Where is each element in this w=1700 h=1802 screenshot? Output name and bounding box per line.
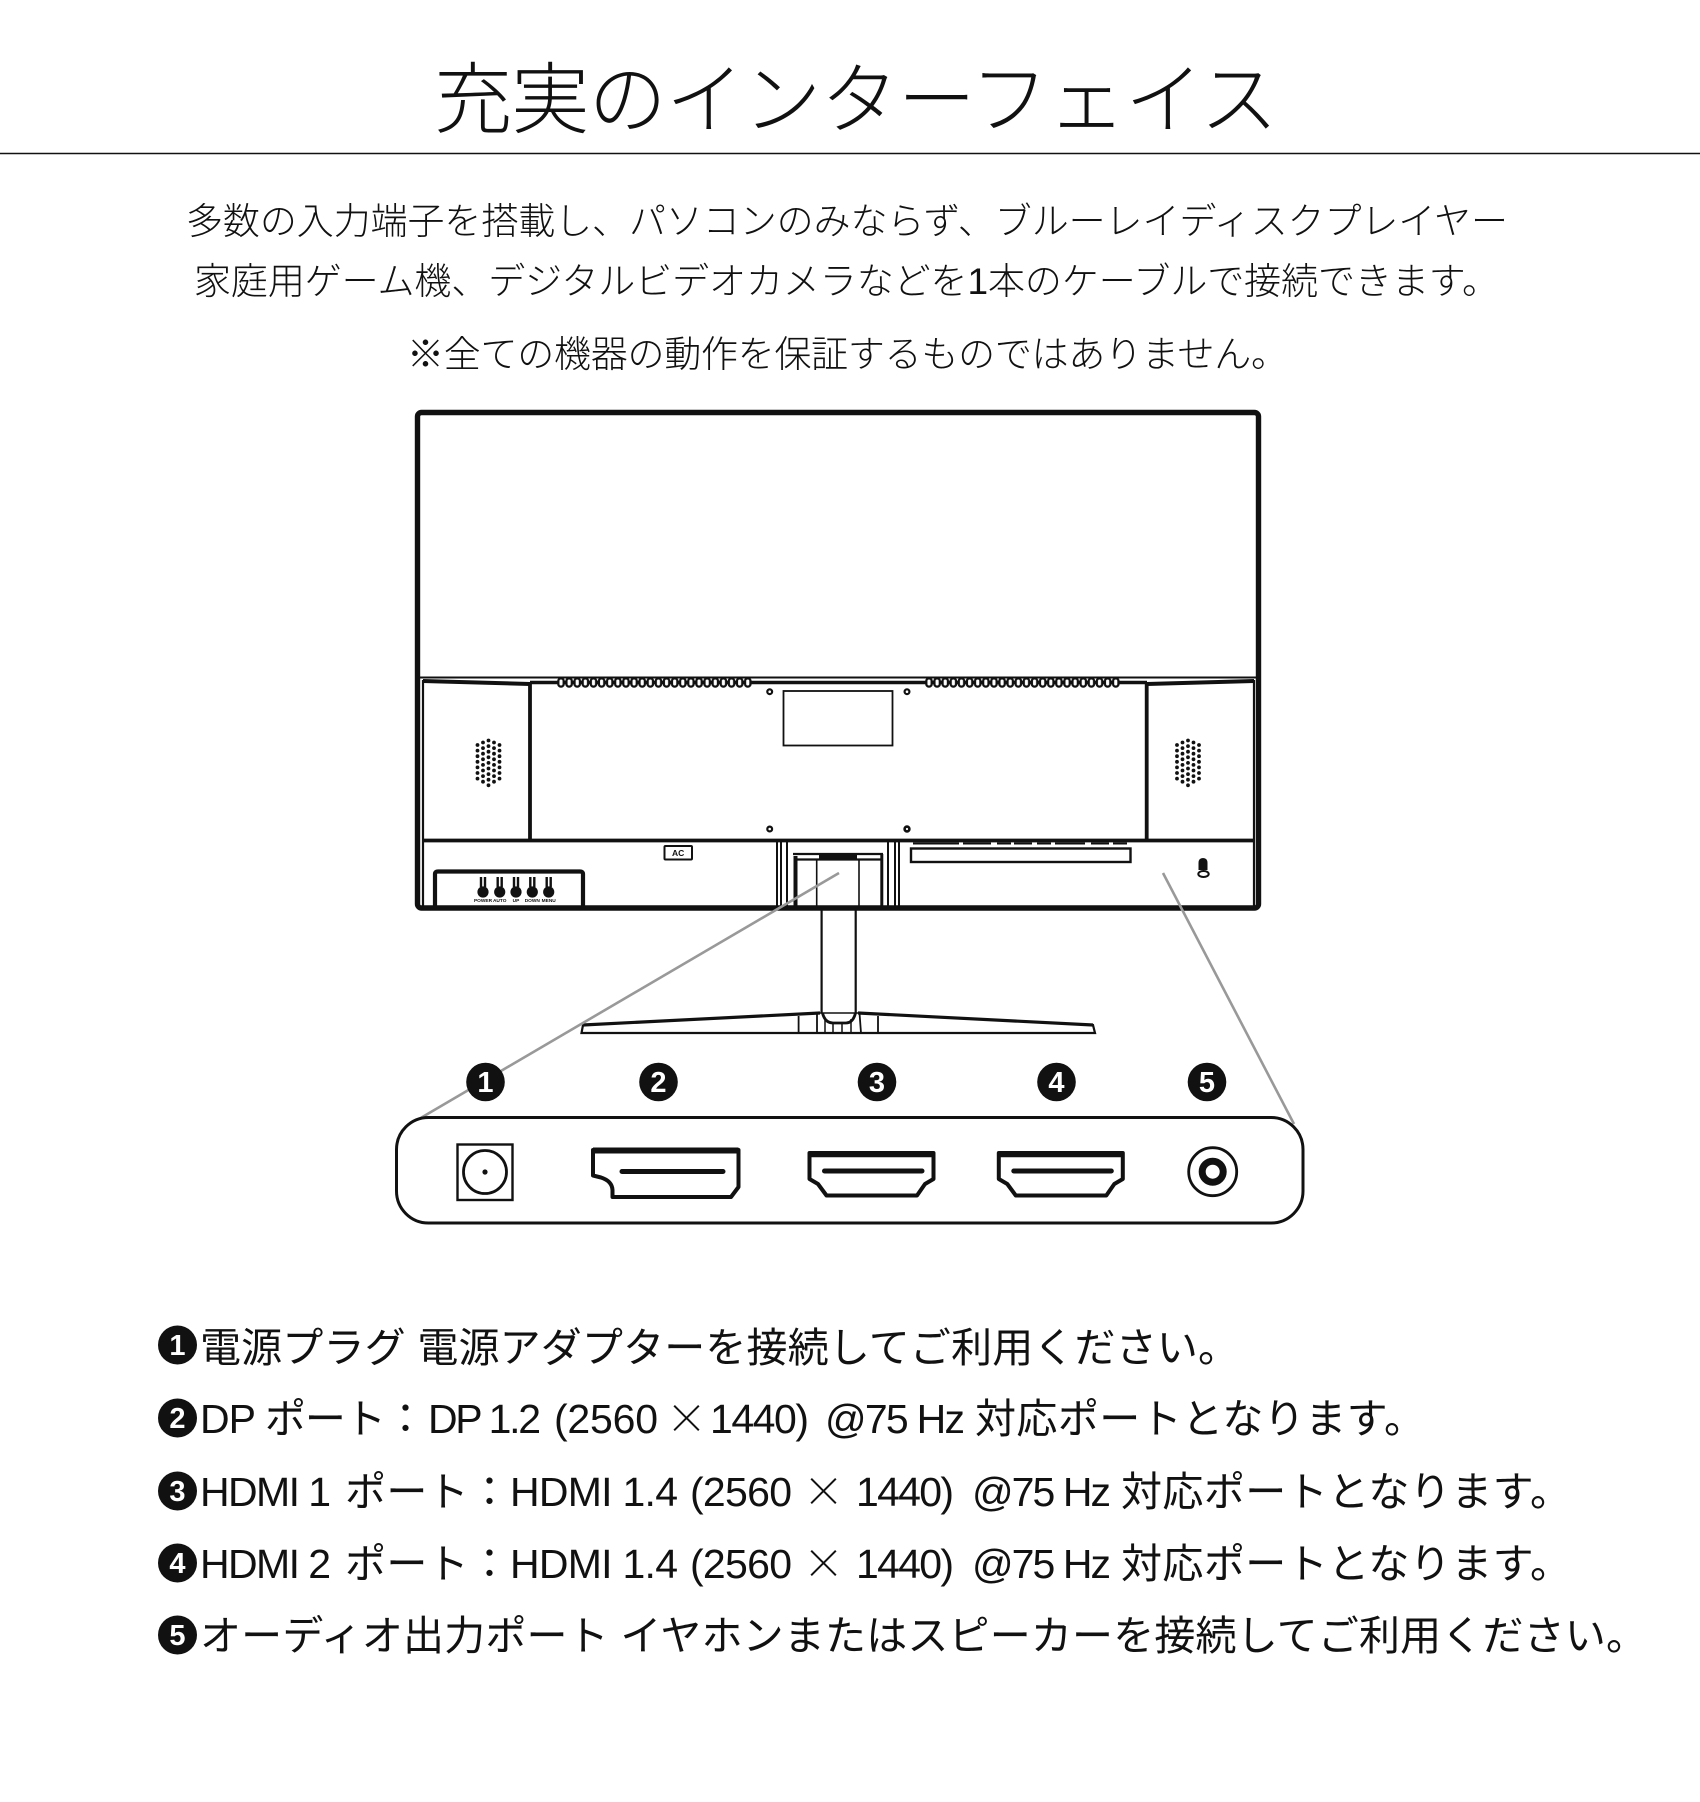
number badge 1: 1 [477,1067,494,1099]
monitor rear diagram [418,412,1258,1033]
number badge 4: 4 [1048,1067,1065,1099]
control buttons: DOWN [525,898,540,904]
right speaker grille [1177,740,1199,787]
monitor body outline [418,412,1258,908]
security lock [1198,858,1209,877]
intro text: 多数の入力端子を搭載し、パソコンのみならず、ブルーレイディスクプレイヤー [186,201,1508,242]
list item 3: 3 [169,1476,186,1508]
number badge 3 [858,1063,896,1101]
list item 2: DP 1.2 [428,1396,541,1442]
list item 4: HDMI 1.4 [510,1541,678,1587]
number badge 4 [1037,1063,1076,1101]
control buttons [435,872,583,906]
callout line: right [1163,873,1294,1124]
port 4: HDMI 2 [999,1153,1123,1196]
stand base [582,1013,1095,1033]
port list [158,1325,1647,1659]
list item 2: 対応ポートとなります。 [975,1396,1425,1442]
disclaimer note: ※全ての機器の動作を保証するものではありません。 [407,334,1288,375]
list item 2 [158,1385,1425,1445]
list item 3 [158,1458,1571,1518]
list item 2: @75 Hz [825,1396,965,1442]
number badge 1 [466,1063,505,1101]
number badge 2 [639,1063,678,1101]
list item 2: (2560 [554,1396,658,1442]
list item 3: @75 Hz [972,1469,1111,1515]
number badge 5 [1188,1063,1226,1101]
list item 2: 1440) [710,1396,809,1442]
list item 5: 5 [169,1620,186,1652]
list item 3: 1440) [856,1469,954,1515]
list item 4: ポート： [345,1541,510,1587]
list item 4: @75 Hz [972,1541,1111,1587]
control buttons: MENU [542,898,556,904]
stand bracket [777,842,899,906]
list item 3: HDMI 1.4 [510,1469,678,1515]
vents [557,677,1120,688]
list item 4: 4 [169,1548,186,1580]
list item 1: 電源プラグ 電源アダプターを接続してご利用ください。 [200,1325,1239,1371]
callout line: left [413,873,839,1122]
list item 4: HDMI 2 [200,1541,331,1587]
number badge 5: 5 [1199,1067,1215,1099]
list item 4: 1440) [856,1541,954,1587]
list item 2: × [666,1385,707,1445]
intro text: 家庭用ゲーム機、デジタルビデオカメラなどを1本のケーブルで接続できます。 [194,261,1499,302]
AC badge: AC [672,848,684,858]
list item 3: HDMI 1 [200,1469,331,1515]
control buttons: POWER [474,898,493,904]
panel outline [396,1118,1303,1223]
title: 充実のインターフェイス [434,56,1278,144]
number badge 3: 3 [869,1067,885,1099]
list item 3: (2560 [690,1469,792,1515]
list item 3: 対応ポートとなります。 [1121,1469,1571,1515]
port 1: power jack [458,1144,512,1200]
control buttons: AUTO [493,898,507,904]
list item 2: 2 [169,1403,186,1435]
port 3: HDMI 1 [810,1153,934,1196]
stand neck [822,910,856,1013]
port 2: DisplayPort [593,1150,738,1197]
side slot and button strip [911,844,1130,862]
AC badge [664,846,692,860]
intro text [186,201,1508,302]
number badge 2: 2 [650,1067,667,1099]
list item 3: × [803,1458,844,1518]
port 5: audio jack [1189,1148,1237,1196]
list item 3: ポート： [345,1469,510,1515]
control buttons: UP [513,898,520,904]
list item 5: オーディオ出力ポート イヤホンまたはスピーカーを接続してご利用ください。 [200,1613,1647,1659]
screen and panel lines [420,678,1256,906]
left speaker grille [478,740,500,787]
list item 1: 1 [169,1330,186,1362]
list item 4: × [803,1530,844,1590]
list item 2: DP ポート： [200,1396,426,1442]
port panel [396,1118,1303,1223]
list item 4: (2560 [690,1541,792,1587]
list item 4 [158,1530,1571,1590]
list item 4: 対応ポートとなります。 [1121,1541,1571,1587]
VESA screws and label plate [767,689,909,831]
